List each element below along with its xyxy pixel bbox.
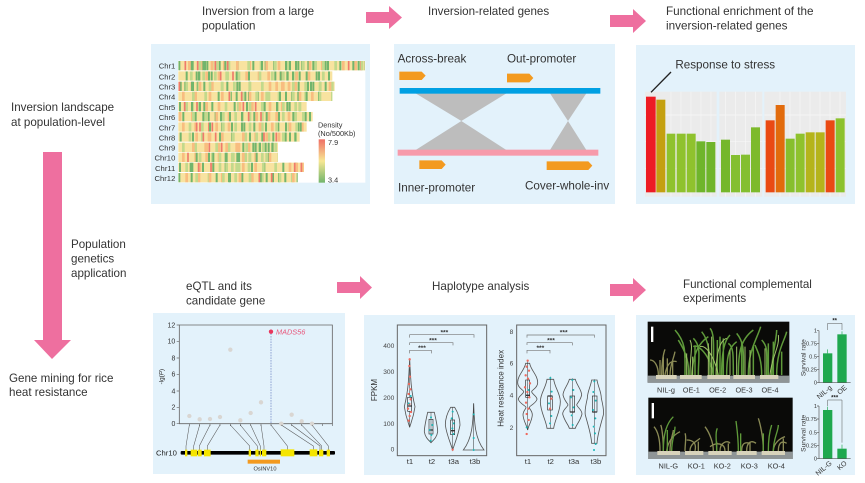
right y tick labels: 2 xyxy=(510,425,514,432)
plot axes xyxy=(179,325,332,424)
pink bar xyxy=(398,150,598,156)
photo labels: OE-2 xyxy=(709,386,726,395)
x labels: t1 xyxy=(407,457,413,466)
orange gene arrows xyxy=(399,72,592,170)
photo labels: NIL-G xyxy=(659,462,678,471)
survival chart top: Survival rate xyxy=(800,339,807,376)
survival chart top xyxy=(800,318,851,401)
density legend xyxy=(318,120,355,184)
survival chart bottom: KO xyxy=(836,460,849,472)
arrow: pink right 2 xyxy=(610,9,646,33)
sample dots red xyxy=(408,359,551,450)
survival chart bottom: 0.75 xyxy=(806,417,817,423)
y tick labels: 4 xyxy=(171,388,175,395)
survival chart top: ** xyxy=(832,318,838,324)
chromosome labels: Chr5 xyxy=(159,103,175,112)
callout line xyxy=(651,72,671,92)
panel: inversion gene classes xyxy=(394,44,615,204)
significance stars: *** xyxy=(560,330,568,337)
right y tick labels: 6 xyxy=(510,361,514,368)
scale bar bottom xyxy=(652,403,654,418)
photo labels: OE-3 xyxy=(735,386,753,395)
panel: enrichment bar chart xyxy=(636,45,855,204)
x labels xyxy=(407,457,601,466)
chromosome labels: Chr3 xyxy=(159,82,175,91)
survival chart bottom xyxy=(800,395,851,478)
survival chart top: 0.75 xyxy=(806,342,817,348)
y tick labels: 8 xyxy=(171,355,175,362)
x labels: t3a xyxy=(569,457,580,466)
chromosome labels: Chr11 xyxy=(155,164,175,173)
survival chart top: 0.25 xyxy=(806,368,817,374)
heatmap base rows xyxy=(178,61,365,182)
OsINV10 label: OsINV10 xyxy=(254,467,276,473)
scale bar top xyxy=(651,327,653,342)
violin chart right frame xyxy=(517,325,606,456)
chromosome labels: Chr4 xyxy=(159,92,176,101)
significance stars: *** xyxy=(440,330,449,337)
survival chart bottom: 0.5 xyxy=(809,430,817,436)
chromosome labels: Chr8 xyxy=(159,133,175,142)
x labels: t2 xyxy=(429,457,435,466)
significance stars xyxy=(418,330,568,352)
y axis title: -lg(P) xyxy=(158,369,165,384)
x labels: t3b xyxy=(591,457,601,466)
left y tick labels: 0 xyxy=(391,447,395,454)
title: haplotype analysis: Haplotype analysis xyxy=(432,280,530,293)
right violins xyxy=(518,363,604,443)
left y tick labels: 300 xyxy=(383,369,395,376)
tick marks xyxy=(177,325,332,426)
left text: inversion landscape: at population-level xyxy=(11,116,105,129)
text: population genetics application: genetics xyxy=(71,252,114,266)
right y tick labels: 8 xyxy=(510,329,514,336)
survival chart top: 0.5 xyxy=(809,355,817,361)
facet backgrounds xyxy=(645,92,846,197)
title: eQTL: eQTL and its xyxy=(186,280,252,293)
density legend: 7.9 xyxy=(328,138,338,147)
survival chart top: 1 xyxy=(814,329,817,335)
survival chart bottom: 0 xyxy=(814,457,817,463)
arrow: pink right 1 xyxy=(366,6,402,29)
significance stars: *** xyxy=(547,337,555,344)
title: inversion from a large population: population xyxy=(202,19,256,32)
category labels: Cover-whole-inv xyxy=(525,179,609,192)
photo labels: OE-4 xyxy=(761,386,779,395)
right y tick labels xyxy=(510,329,514,432)
right y tick labels: 4 xyxy=(510,393,514,400)
chromosome labels: Chr2 xyxy=(159,72,175,81)
category labels: Across-break xyxy=(398,52,467,65)
chromosome labels: Chr7 xyxy=(159,123,175,132)
grid lines xyxy=(645,92,846,197)
yellow gene blocks xyxy=(185,449,330,456)
left text: gene mining: Gene mining for rice xyxy=(9,372,113,385)
y tick labels: 10 xyxy=(168,339,175,346)
arrow: downward pink xyxy=(34,152,71,359)
y tick labels: 0 xyxy=(171,421,175,428)
panel: violin plots: Heat resistance index xyxy=(496,350,505,427)
category labels xyxy=(398,52,609,195)
text: population genetics application: Population xyxy=(71,238,126,251)
panel: chromosome density heatmap xyxy=(151,44,374,204)
gene label: MADS56 xyxy=(276,328,306,337)
photo: OE plants xyxy=(648,322,789,383)
density legend: (No/500Kb) xyxy=(318,129,355,138)
left y tick labels: 200 xyxy=(383,395,395,402)
arrow: pink right 4 xyxy=(610,278,646,302)
violin chart left frame xyxy=(397,325,487,456)
sample dots teal xyxy=(409,378,596,450)
photo labels: KO-3 xyxy=(741,462,758,471)
panel: violin plots xyxy=(364,315,615,475)
photo labels: KO-2 xyxy=(714,462,731,471)
significance stars: *** xyxy=(536,345,545,352)
photo labels: KO-1 xyxy=(688,462,705,471)
survival chart top: 0 xyxy=(814,381,817,387)
chromosome labels: Chr1 xyxy=(159,62,175,71)
photo: KO plants xyxy=(648,398,793,459)
chromosome bar xyxy=(181,451,335,455)
grey points xyxy=(187,347,314,426)
title: functional complemental experiments: experiments xyxy=(683,292,746,305)
photo labels: KO-4 xyxy=(768,462,785,471)
title: functional complemental experiments: Functional complemental xyxy=(683,278,812,291)
photo labels: NIL-g xyxy=(657,386,675,395)
chromosome labels xyxy=(154,62,176,183)
connector lines xyxy=(186,425,328,450)
photo labels xyxy=(657,386,785,471)
panel: functional experiments xyxy=(636,315,855,478)
density legend: Density xyxy=(318,120,343,129)
photo labels: OE-1 xyxy=(683,386,700,395)
title: inversion-related genes: Inversion-related genes xyxy=(428,5,549,18)
chromosome labels: Chr9 xyxy=(159,143,175,152)
bars xyxy=(646,97,845,192)
white plot area xyxy=(178,61,365,183)
survival chart bottom: *** xyxy=(831,395,839,401)
y axis titles: FPKM xyxy=(370,379,379,401)
y tick labels: 12 xyxy=(168,322,175,329)
survival chart bottom: 0.25 xyxy=(806,443,817,449)
chromosome labels: Chr12 xyxy=(154,174,175,183)
left text: inversion landscape: Inversion landscape xyxy=(11,101,114,114)
heatmap stripes xyxy=(179,61,374,182)
survival chart top: NIL-g xyxy=(816,384,834,401)
density legend: 3.4 xyxy=(328,175,338,184)
x labels: t3b xyxy=(470,457,480,466)
y tick labels: 6 xyxy=(171,372,175,379)
red point MADS56 xyxy=(269,329,273,334)
legend gradient xyxy=(319,139,325,183)
left text: gene mining: heat resistance xyxy=(9,386,88,399)
survival chart bottom: NIL-G xyxy=(815,460,834,478)
category labels: Inner-promoter xyxy=(398,182,475,195)
survival chart bottom: 1 xyxy=(814,404,817,410)
category labels: Out-promoter xyxy=(507,52,576,65)
survival chart top: OE xyxy=(836,384,849,396)
y tick labels: 2 xyxy=(171,405,175,412)
x labels: t2 xyxy=(547,457,554,466)
title: inversion from a large population: Inversion from a large xyxy=(202,5,314,18)
significance stars: *** xyxy=(429,337,437,344)
dashed marker line xyxy=(270,333,272,423)
y tick labels xyxy=(168,322,175,428)
left y tick labels: 100 xyxy=(383,421,395,428)
grey inversion shapes xyxy=(416,93,586,150)
chromosome labels: Chr10 xyxy=(154,154,175,163)
left y tick labels: 400 xyxy=(383,343,395,350)
left y tick labels xyxy=(383,343,395,454)
title: functional enrichment: inversion-related genes xyxy=(666,19,788,32)
significance brackets xyxy=(410,335,594,353)
panel: manhattan plot xyxy=(153,313,345,474)
chromosome labels: Chr6 xyxy=(159,113,175,122)
arrow: pink right 3 xyxy=(337,276,372,299)
significance stars: *** xyxy=(418,345,426,352)
blue reference bar xyxy=(400,88,600,94)
text: population genetics application: application xyxy=(71,267,126,280)
survival chart bottom: Survival rate xyxy=(800,415,807,452)
x labels: t3a xyxy=(448,457,460,466)
title: functional enrichment: Functional enrichment of the xyxy=(666,5,813,18)
left violins xyxy=(404,358,484,450)
box plots xyxy=(408,360,597,450)
x labels: t1 xyxy=(525,457,531,466)
OsINV10 bar xyxy=(248,460,280,464)
title: eQTL: candidate gene xyxy=(186,294,265,307)
chromosome label: Chr10 xyxy=(156,449,177,458)
callout label: Response to stress xyxy=(675,58,775,71)
